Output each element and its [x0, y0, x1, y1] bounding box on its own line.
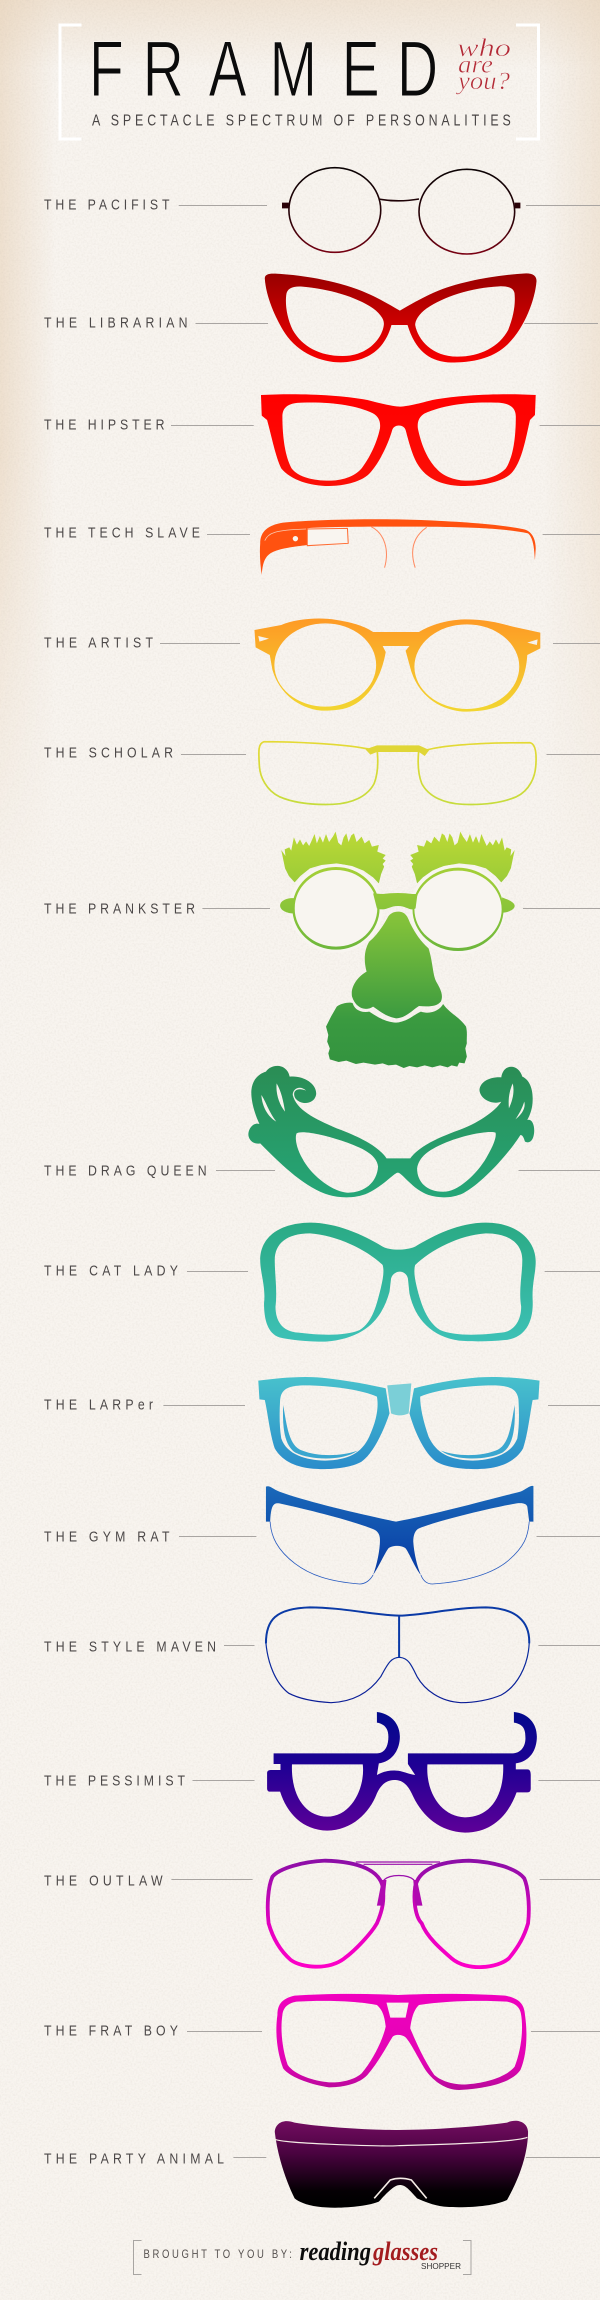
glasses: butterfly frames [260, 1223, 536, 1342]
logo: reading glasses shopper: glasses [372, 2237, 438, 2266]
glasses: double-bridge frames [276, 1994, 526, 2090]
leader lines [187, 2030, 600, 2032]
leader lines [192, 1780, 600, 1782]
left eyebrow [281, 832, 386, 883]
label: THE HIPSTER [44, 416, 165, 433]
label: THE PACIFIST [44, 196, 170, 213]
handwritten tagline: who are you?: you? [455, 68, 511, 95]
row: the party animal [44, 2121, 600, 2208]
footer credit [134, 2237, 471, 2274]
row: the pacifist [44, 168, 600, 254]
glasses: shutter visor [275, 2121, 528, 2208]
label: THE OUTLAW [44, 1872, 163, 1889]
leader lines [160, 642, 600, 644]
glasses: rounded keyhole frames [254, 619, 540, 712]
glasses: groucho disguise [280, 832, 515, 1068]
row: the scholar [44, 742, 600, 804]
nose [352, 912, 442, 1018]
row: the artist [44, 619, 600, 712]
row: the drag queen [44, 1066, 600, 1197]
logo: reading glasses shopper: reading [300, 2237, 371, 2266]
round frames [292, 867, 504, 951]
row: the librarian [44, 273, 598, 362]
row: the frat boy [44, 1994, 600, 2090]
leader lines [179, 204, 600, 206]
row: the prankster [44, 832, 600, 1068]
footer bracket frame [134, 2240, 471, 2274]
brought to you by: BROUGHT TO YOU BY: [144, 2248, 292, 2261]
handwritten tagline: who are you?: who [457, 35, 511, 62]
row: the tech slave [44, 519, 600, 575]
row: the hipster [44, 394, 600, 486]
glasses: cat-eye frames [265, 273, 537, 362]
moustache [326, 1003, 467, 1068]
title: FRAMED: FRAMED [89, 25, 438, 113]
leader lines [216, 1170, 600, 1172]
row: the pessimist [44, 1712, 600, 1833]
leader lines [181, 754, 600, 756]
title block [60, 25, 538, 139]
leader lines [224, 1644, 600, 1646]
subtitle: A SPECTACLE SPECTRUM OF PERSONALITIES [92, 111, 511, 129]
label: THE LARPer [44, 1396, 153, 1413]
row: the outlaw [44, 1861, 600, 1967]
label: THE LIBRARIAN [44, 314, 187, 331]
glasses: round wire frames [282, 168, 520, 254]
lens halo [289, 864, 505, 954]
glasses: sport half-frames [266, 1486, 533, 1584]
label: THE FRAT BOY [44, 2022, 178, 2039]
row: the cat lady [44, 1223, 600, 1342]
glasses: curled flamboyant frames [248, 1066, 534, 1197]
glasses: aviator frames [268, 1861, 529, 1967]
glasses: thick wayfarer frames [261, 394, 536, 486]
right eyebrow [410, 832, 515, 883]
leader lines [196, 322, 598, 324]
leader lines [233, 2156, 600, 2158]
temple tabs and bridge [280, 893, 515, 913]
title bracket frame [60, 25, 538, 139]
label: THE SCHOLAR [44, 745, 173, 761]
glasses: half-moon frames with hooks [267, 1712, 537, 1833]
leader lines [171, 1878, 600, 1880]
label: THE ARTIST [44, 634, 154, 651]
glasses: taped nerd frames [258, 1377, 540, 1469]
logo: reading glasses shopper [300, 2237, 461, 2271]
leader lines [207, 534, 600, 536]
label: THE TECH SLAVE [44, 524, 200, 541]
logo: reading glasses shopper: SHOPPER [421, 2261, 461, 2271]
leader lines [171, 424, 600, 426]
label: THE STYLE MAVEN [44, 1638, 216, 1655]
glasses: smart-glass band [260, 519, 536, 575]
label: THE PESSIMIST [44, 1772, 186, 1789]
leader lines [179, 1536, 600, 1538]
handwritten tagline: who are you?: are [458, 52, 493, 79]
leader lines [187, 1270, 600, 1272]
label: THE PARTY ANIMAL [44, 2150, 224, 2167]
label: THE PRANKSTER [44, 900, 195, 917]
row: the LARPer [44, 1377, 600, 1469]
glasses: half-rim frames [259, 742, 536, 804]
glasses: thin shield frames [266, 1607, 529, 1703]
handwritten tagline: who are you? [455, 35, 511, 95]
label: THE DRAG QUEEN [44, 1163, 207, 1179]
row: the gym rat [44, 1486, 600, 1584]
label: THE CAT LADY [44, 1263, 178, 1279]
leader lines [163, 1404, 600, 1406]
row: the style maven [44, 1607, 600, 1703]
label: THE GYM RAT [44, 1528, 170, 1545]
leader lines [202, 908, 600, 910]
